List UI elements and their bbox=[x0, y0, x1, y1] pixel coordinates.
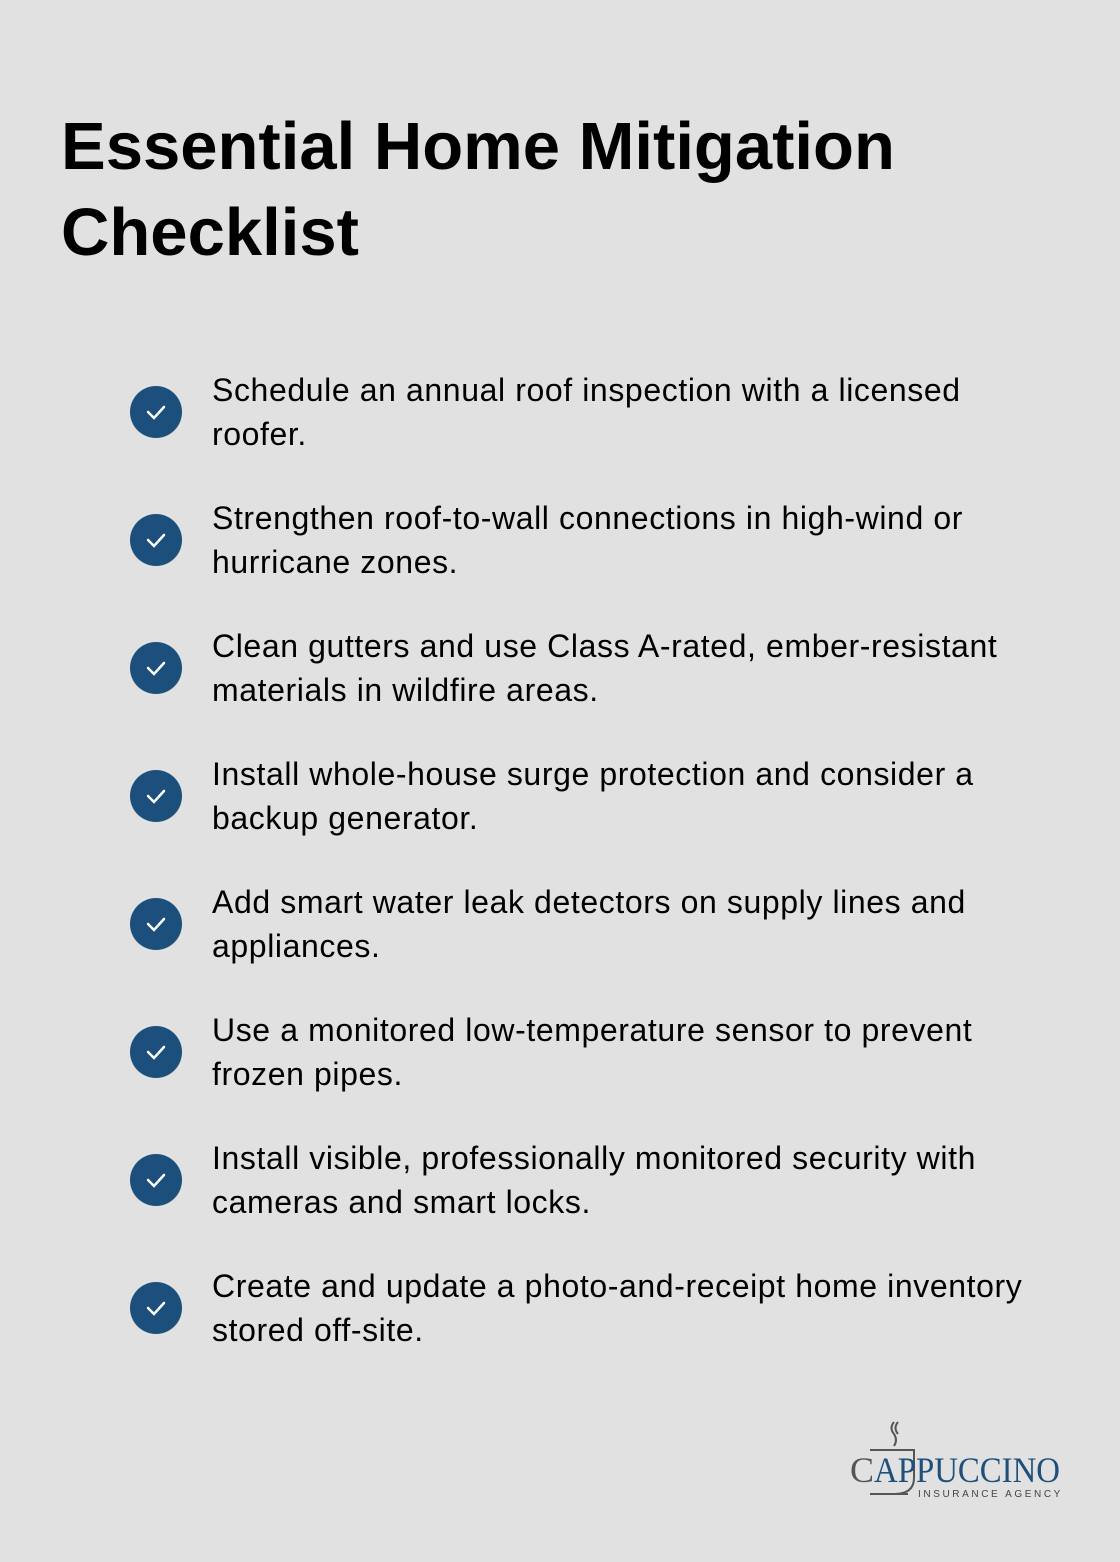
logo: C bbox=[850, 1450, 874, 1490]
item 3 bbox=[130, 628, 997, 708]
item 7 bbox=[130, 1140, 976, 1220]
title: Essential Home Mitigation bbox=[61, 109, 895, 184]
item 2 bbox=[130, 500, 963, 580]
item 8 bbox=[130, 1268, 1022, 1348]
item 3: materials in wildfire areas. bbox=[212, 672, 599, 708]
item 4: backup generator. bbox=[212, 800, 478, 836]
item 3: Clean gutters and use Class A-rated, ember-resistant bbox=[212, 628, 997, 664]
item 1: roofer. bbox=[212, 416, 307, 452]
item 4: Install whole-house surge protection and consider a bbox=[212, 756, 974, 792]
item 5 bbox=[130, 884, 966, 964]
item 1: Schedule an annual roof inspection with a licensed bbox=[212, 372, 961, 408]
item 8: stored off-site. bbox=[212, 1312, 424, 1348]
item 6: frozen pipes. bbox=[212, 1056, 403, 1092]
item 4 bbox=[130, 756, 974, 836]
item 6: Use a monitored low-temperature sensor to prevent bbox=[212, 1012, 972, 1048]
item 2: Strengthen roof-to-wall connections in high-wind or bbox=[212, 500, 963, 536]
item 6 bbox=[130, 1012, 972, 1092]
logo bbox=[850, 1421, 1063, 1500]
item 1 bbox=[130, 372, 961, 452]
item 7: Install visible, professionally monitored security with bbox=[212, 1140, 976, 1176]
title: Checklist bbox=[61, 195, 359, 270]
item 2: hurricane zones. bbox=[212, 544, 458, 580]
item 5: appliances. bbox=[212, 928, 380, 964]
logo: INSURANCE AGENCY bbox=[918, 1489, 1063, 1500]
item 5: Add smart water leak detectors on supply lines and bbox=[212, 884, 966, 920]
item 7: cameras and smart locks. bbox=[212, 1184, 591, 1220]
title bbox=[61, 109, 895, 270]
icon: cup bbox=[870, 1422, 914, 1494]
item 8: Create and update a photo-and-receipt home inventory bbox=[212, 1268, 1022, 1304]
